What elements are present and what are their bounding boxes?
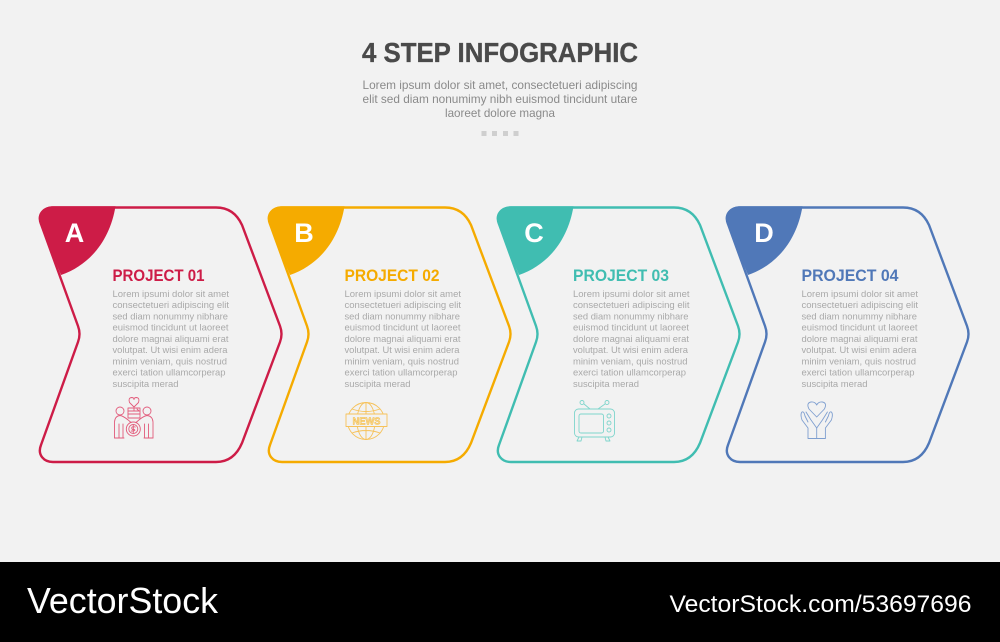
body text D: Lorem ipsumi dolor sit amet	[802, 288, 918, 299]
body text C: volutpat. Ut wisi enim adera	[573, 344, 689, 355]
body text A: volutpat. Ut wisi enim adera	[112, 344, 228, 355]
badge letter D: D	[754, 218, 774, 248]
body text D: exerci tation ullamcorperap	[802, 367, 914, 378]
body text C: exerci tation ullamcorperap	[573, 367, 686, 378]
footer bar	[0, 562, 1000, 642]
title: 4 STEP INFOGRAPHIC	[362, 37, 638, 68]
body text A: Lorem ipsumi dolor sit amet	[112, 288, 229, 299]
arrow outline D	[727, 208, 968, 462]
body text B: suscipita merad	[344, 378, 410, 389]
icon: news globe	[346, 402, 387, 440]
body text B: dolore magnai aliquami erat	[344, 333, 461, 344]
panel: project 04	[726, 206, 968, 462]
arrow outline C	[498, 208, 740, 462]
body text B: exerci tation ullamcorperap	[344, 367, 458, 378]
body text A: sed diam nonummy nibhare	[112, 310, 228, 322]
badge wedge A	[39, 206, 116, 275]
body text B	[344, 288, 461, 389]
body text D: euismod tincidunt ut laoreet	[802, 322, 918, 333]
panel: project 01	[39, 206, 281, 462]
body text A: consectetueri adipiscing elit	[112, 299, 229, 310]
body text C	[573, 288, 690, 389]
icon: television	[574, 400, 614, 441]
body text A: exerci tation ullamcorperap	[112, 367, 226, 378]
body text B: consectetueri adipiscing elit	[344, 299, 461, 310]
subtitle text block: Lorem ipsum dolor sit amet, consectetueri adipiscing	[362, 78, 638, 92]
icon: news globe: NEWS	[352, 416, 381, 428]
body text C: Lorem ipsumi dolor sit amet	[573, 288, 690, 299]
body text D: minim veniam, quis nostrud	[802, 356, 916, 366]
body text A	[112, 288, 229, 389]
badge wedge D	[726, 206, 802, 275]
heading: project 01: PROJECT 01	[112, 267, 204, 285]
body text C: suscipita merad	[573, 378, 639, 389]
body text B: Lorem ipsumi dolor sit amet	[344, 288, 461, 299]
footer logo text: VectorStock	[27, 580, 219, 621]
body text C: euismod tincidunt ut laoreet	[573, 322, 689, 333]
body text B: minim veniam, quis nostrud	[344, 356, 459, 366]
body text D	[802, 288, 918, 389]
body text C: minim veniam, quis nostrud	[573, 356, 688, 366]
body text D: sed diam nonummy nibhare	[802, 310, 917, 322]
body text B: volutpat. Ut wisi enim adera	[344, 344, 460, 355]
heading: project 02: PROJECT 02	[344, 267, 440, 285]
body text A: suscipita merad	[112, 378, 178, 389]
body text D: suscipita merad	[802, 378, 868, 389]
body text C: consectetueri adipiscing elit	[573, 299, 690, 310]
body text D: volutpat. Ut wisi enim adera	[802, 344, 917, 355]
panel: project 03	[497, 206, 740, 462]
body text D: dolore magnai aliquami erat	[802, 333, 918, 344]
badge wedge C	[497, 206, 574, 275]
body text A: euismod tincidunt ut laoreet	[112, 322, 229, 333]
heading: project 03: PROJECT 03	[573, 267, 669, 285]
arrow outline B	[269, 208, 510, 462]
badge letter A: A	[65, 218, 84, 248]
icon: hands holding heart	[801, 402, 832, 438]
badge letter B: B	[294, 218, 314, 248]
badge letter C: C	[524, 218, 544, 248]
badge wedge B	[268, 206, 344, 275]
heading: project 04: PROJECT 04	[802, 267, 899, 285]
body text B: euismod tincidunt ut laoreet	[344, 322, 461, 333]
body text B: sed diam nonummy nibhare	[344, 310, 460, 322]
body text A: dolore magnai aliquami erat	[112, 333, 229, 344]
panel: project 02	[268, 206, 510, 462]
body text C: sed diam nonummy nibhare	[573, 310, 688, 322]
arrow outline A	[40, 208, 282, 462]
pagination dots	[482, 131, 518, 136]
subtitle text block: elit sed diam nonumimy nibh euismod tincidunt utare	[362, 92, 638, 106]
body text A: minim veniam, quis nostrud	[112, 356, 227, 366]
body text D: consectetueri adipiscing elit	[802, 299, 918, 310]
footer url text: VectorStock.com/53697696	[670, 591, 972, 618]
body text C: dolore magnai aliquami erat	[573, 333, 689, 344]
icon: couple with heart and money	[114, 398, 153, 438]
subtitle text block	[362, 78, 638, 120]
subtitle text block: laoreet dolore magna	[445, 106, 555, 120]
